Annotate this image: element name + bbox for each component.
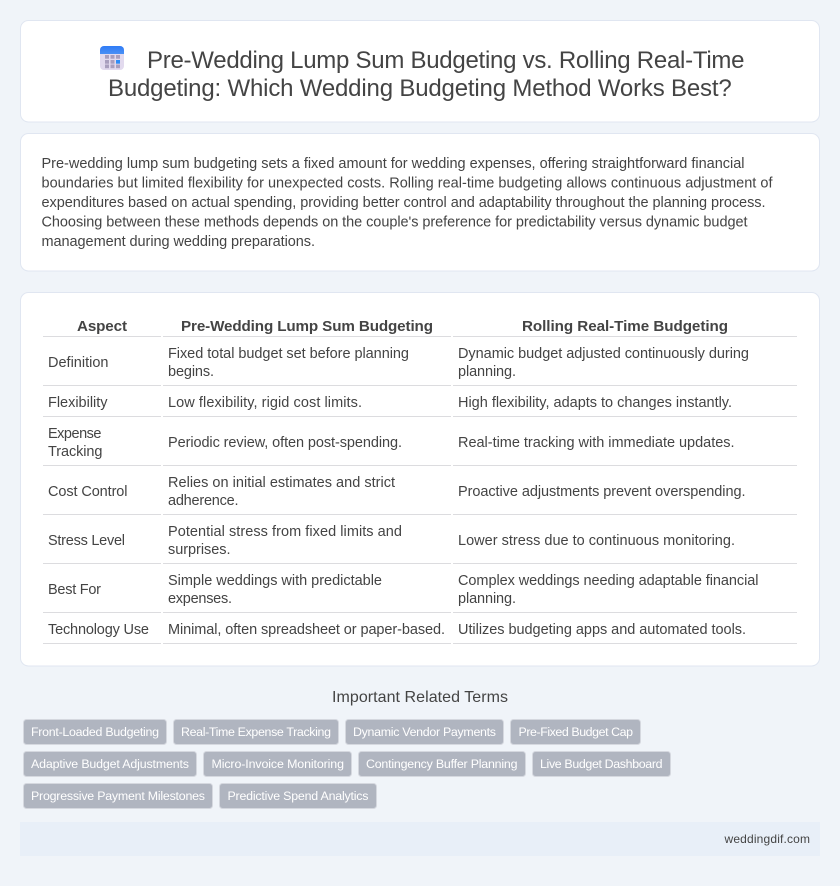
row: best for: expenses.: [168, 591, 232, 607]
tag: Live Budget Dashboard: Live Budget Dashboard: [540, 757, 663, 771]
row: technology use: Utilizes budgeting apps and automated tools.: [458, 622, 746, 638]
tag: Real-Time Expense Tracking: Real-Time Expense Tracking: [181, 725, 331, 739]
row: definition: Fixed total budget set before planning: [168, 346, 409, 362]
row: definition: planning.: [458, 364, 516, 380]
text block: introduction: [42, 156, 773, 250]
text block: introduction: Pre-wedding lump sum budgeting sets a fixed amount for wedding expenses, offering straightforward financial: [42, 156, 744, 172]
row: definition: Dynamic budget adjusted continuously during: [458, 346, 749, 362]
text block: introduction: management during wedding preparations.: [42, 234, 315, 250]
tag: Real-Time Expense Tracking: [174, 720, 338, 744]
table header: Aspect: [77, 318, 127, 335]
tag: Pre-Fixed Budget Cap: [510, 720, 640, 744]
row: flexibility: High flexibility, adapts to changes instantly.: [458, 395, 732, 411]
row: definition: [48, 346, 749, 380]
tag: Predictive Spend Analytics: [220, 784, 376, 808]
tag: Adaptive Budget Adjustments: Adaptive Budget Adjustments: [31, 757, 189, 771]
text block: introduction: boundaries but limited flexibility for unexpected costs. Rolling real-time budgeting allows continuous adjustment of: [42, 176, 773, 192]
tag: Front-Loaded Budgeting: Front-Loaded Budgeting: [31, 725, 159, 739]
panel: header: [20, 20, 820, 122]
row: cost control: Proactive adjustments prevent overspending.: [458, 484, 746, 500]
row: cost control: [48, 475, 746, 509]
icon: calendar: [100, 46, 124, 70]
row: cost control: Relies on initial estimates and strict: [168, 475, 395, 491]
row: stress level: Lower stress due to continuous monitoring.: [458, 533, 735, 549]
text block: introduction: Choosing between these methods depends on the couple's preference for predictability versus dynamic budget: [42, 214, 748, 230]
row: stress level: Stress Level: [48, 533, 125, 549]
row: best for: Best For: [48, 582, 101, 598]
heading: important related terms: Important Related Terms: [332, 689, 508, 706]
row: stress level: surprises.: [168, 542, 230, 558]
table header: Rolling Real-Time Budgeting: [522, 318, 728, 335]
row: definition: begins.: [168, 364, 214, 380]
title: Budgeting: Which Wedding Budgeting Method Works Best?: [108, 75, 732, 102]
row: flexibility: Flexibility: [48, 395, 108, 411]
tag: Micro-Invoice Monitoring: Micro-Invoice Monitoring: [212, 757, 344, 771]
row: best for: planning.: [458, 591, 516, 607]
tag: Adaptive Budget Adjustments: [24, 752, 196, 776]
tag list: related terms: [24, 720, 670, 808]
row: flexibility: Low flexibility, rigid cost limits.: [168, 395, 362, 411]
tag: Contingency Buffer Planning: [358, 752, 526, 776]
tag: Pre-Fixed Budget Cap: Pre-Fixed Budget Cap: [518, 725, 633, 739]
row: expense tracking: [48, 426, 734, 460]
row: definition: Definition: [48, 355, 108, 371]
panel: introduction: [20, 134, 820, 271]
tag: Progressive Payment Milestones: [24, 784, 212, 808]
row: best for: [48, 573, 758, 607]
row: expense tracking: Expense: [48, 426, 102, 442]
row: stress level: Potential stress from fixed limits and: [168, 524, 402, 540]
text block: introduction: expenditures based on actual spending, providing better control and adaptability throughout the planning process.: [42, 195, 766, 211]
row: expense tracking: Periodic review, often post-spending.: [168, 435, 402, 451]
tag: Micro-Invoice Monitoring: [204, 752, 352, 776]
row: technology use: Technology Use: [48, 622, 149, 638]
row: expense tracking: Tracking: [48, 444, 102, 460]
tag: Progressive Payment Milestones: Progressive Payment Milestones: [31, 789, 205, 803]
tag: Predictive Spend Analytics: Predictive Spend Analytics: [228, 789, 368, 803]
row: technology use: [48, 622, 746, 638]
footer: [20, 822, 820, 856]
row: technology use: Minimal, often spreadsheet or paper-based.: [168, 622, 445, 638]
row: best for: Simple weddings with predictable: [168, 573, 382, 589]
table header: [77, 318, 728, 335]
row: best for: Complex weddings needing adaptable financial: [458, 573, 758, 589]
tag: Contingency Buffer Planning: Contingency Buffer Planning: [366, 757, 518, 771]
tag: Live Budget Dashboard: [532, 752, 670, 776]
panel: comparison table: [20, 292, 820, 666]
tag: Dynamic Vendor Payments: [346, 720, 504, 744]
table header: Pre-Wedding Lump Sum Budgeting: [181, 318, 433, 335]
row: stress level: [48, 524, 735, 558]
row: expense tracking: Real-time tracking with immediate updates.: [458, 435, 734, 451]
row: flexibility: [48, 395, 732, 411]
row: cost control: adherence.: [168, 493, 238, 509]
title: [108, 47, 744, 102]
footer: weddingdif.com: [724, 832, 810, 846]
row: cost control: Cost Control: [48, 484, 128, 500]
tag: Dynamic Vendor Payments: Dynamic Vendor Payments: [353, 725, 496, 739]
title: Pre-Wedding Lump Sum Budgeting vs. Rolling Real-Time: [147, 47, 744, 74]
tag: Front-Loaded Budgeting: [24, 720, 166, 744]
